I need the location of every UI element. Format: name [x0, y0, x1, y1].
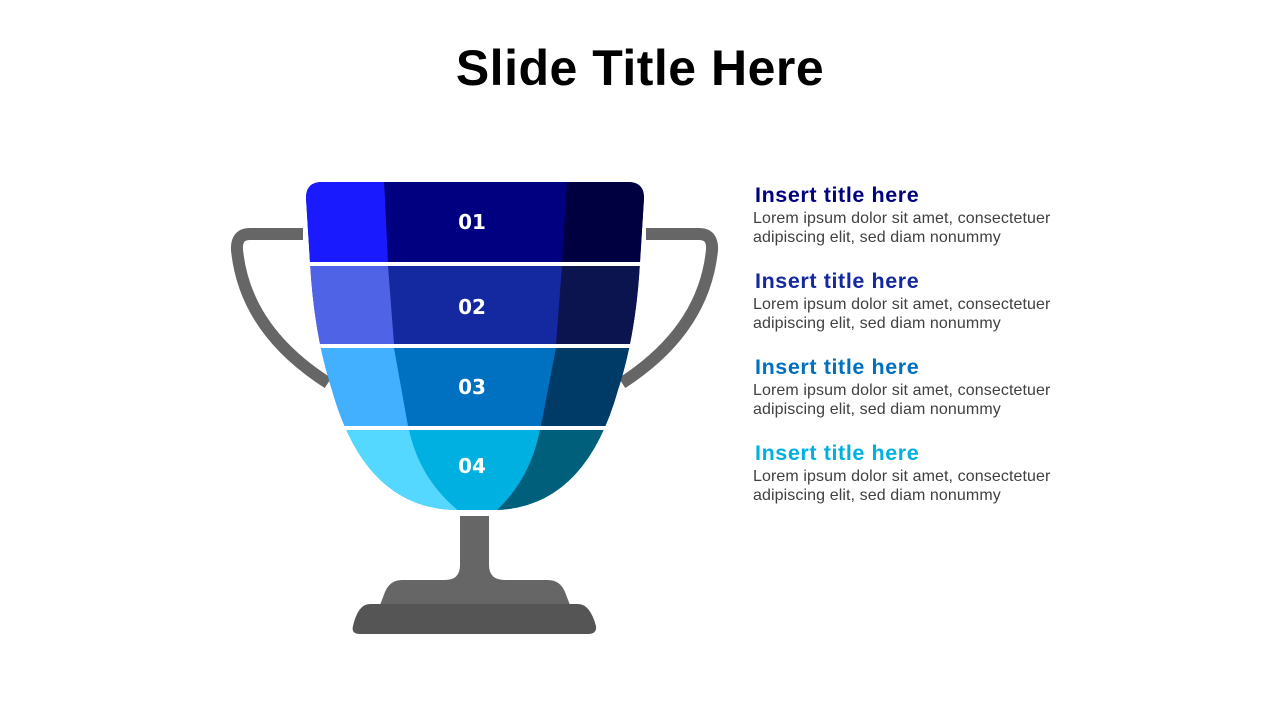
item 4 [753, 441, 1050, 504]
item 3: Insert title here [755, 355, 919, 379]
item 1: Insert title here [755, 183, 919, 207]
base [353, 604, 596, 634]
band 03 [320, 348, 630, 426]
band 04 [346, 430, 604, 510]
band 01 [300, 180, 650, 262]
title: Slide Title Here [456, 40, 824, 96]
item 2: Insert title here [755, 269, 919, 293]
numbers: 01 [458, 210, 486, 234]
item 2: adipiscing elit, sed diam nonummy [753, 315, 1001, 332]
item 1: Lorem ipsum dolor sit amet, consectetuer [753, 210, 1050, 227]
right handle [622, 234, 712, 383]
item 3: adipiscing elit, sed diam nonummy [753, 401, 1001, 418]
band 02 [300, 266, 650, 344]
item 4: adipiscing elit, sed diam nonummy [753, 487, 1001, 504]
numbers: 02 [458, 295, 486, 319]
item 3 [753, 355, 1050, 418]
item 4: Lorem ipsum dolor sit amet, consectetuer [753, 468, 1050, 485]
item 1 [753, 183, 1050, 246]
numbers [458, 210, 486, 478]
item 3: Lorem ipsum dolor sit amet, consectetuer [753, 382, 1050, 399]
trophy graphic [230, 182, 718, 634]
numbers: 04 [458, 454, 486, 478]
stem [380, 516, 570, 605]
item 1: adipiscing elit, sed diam nonummy [753, 229, 1001, 246]
left handle [237, 234, 328, 383]
numbers: 03 [458, 375, 486, 399]
item 4: Insert title here [755, 441, 919, 465]
item 2 [753, 269, 1050, 332]
cup segments [300, 180, 650, 512]
item 2: Lorem ipsum dolor sit amet, consectetuer [753, 296, 1050, 313]
